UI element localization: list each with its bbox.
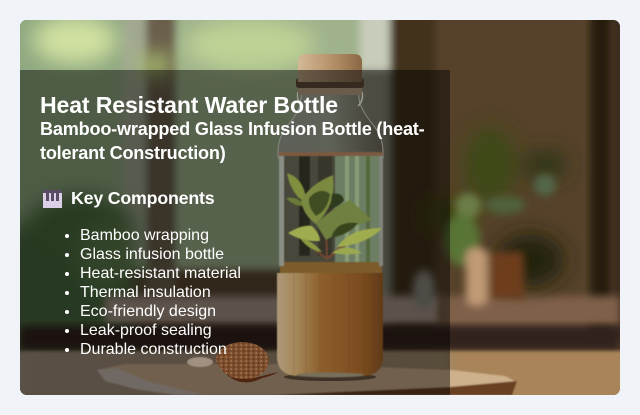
components list: Thermal insulation [80,284,211,301]
title: Heat Resistant Water Bottle [40,92,338,118]
wooden board [97,364,517,395]
translucent text panel [20,70,450,395]
glass bottle [277,54,383,381]
components list: Durable construction [80,341,227,358]
components list: Bamboo wrapping [80,227,209,244]
components list: Eco-friendly design [80,303,216,320]
components list: Glass infusion bottle [80,246,224,263]
neck and cap [298,86,362,95]
subtitle: Bamboo-wrapped Glass Infusion Bottle (heat-tolerant Construction) [40,119,424,162]
infused plant [286,173,382,259]
components list: Leak-proof sealing [80,322,212,339]
section heading: key components: Key Components [71,188,214,208]
icon: piano keyboard [43,190,62,208]
components list [65,227,241,358]
bamboo sleeve [277,273,383,378]
table [10,351,630,401]
seed pod [187,342,278,382]
components list: Heat-resistant material [80,265,241,282]
background plant and pot [413,127,567,310]
